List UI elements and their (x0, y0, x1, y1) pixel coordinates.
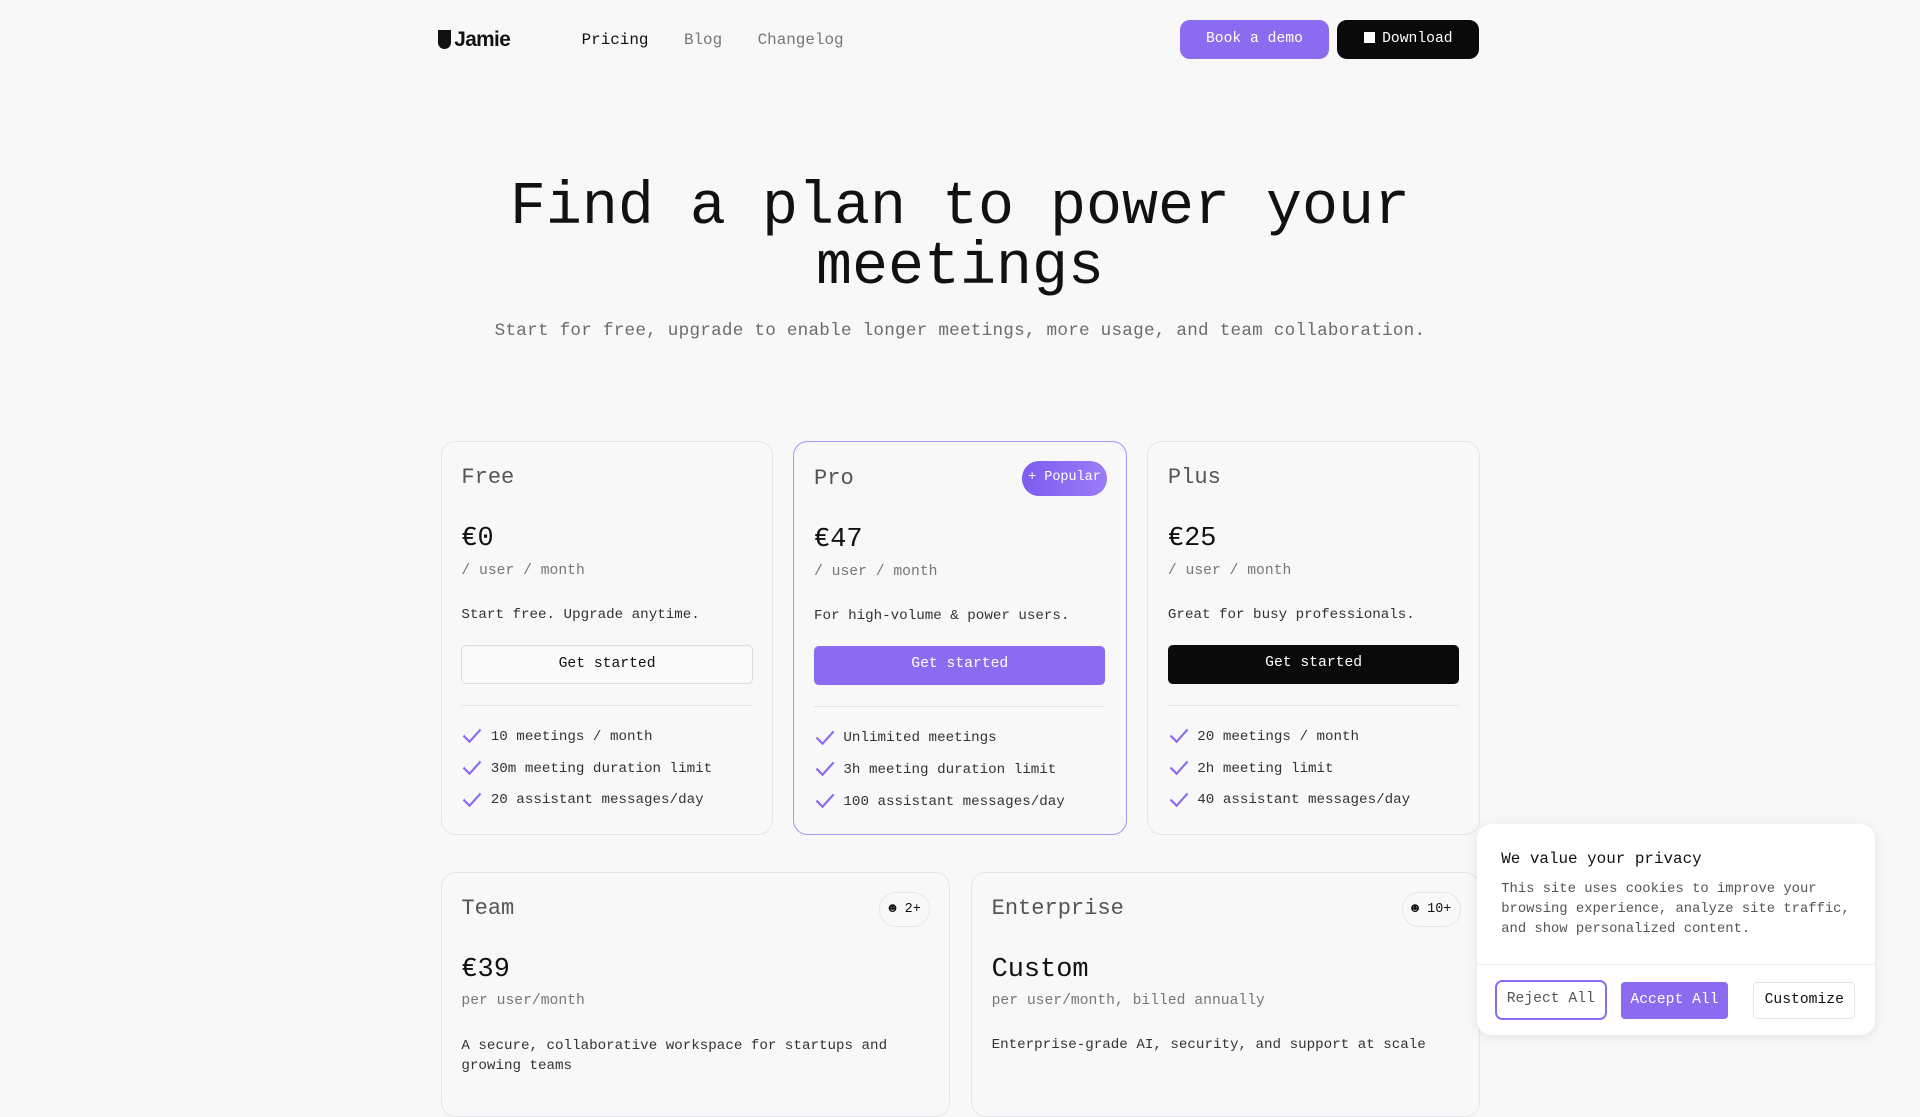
panel: team (441, 872, 950, 1117)
button: accept (1621, 982, 1728, 1019)
title: meetings (816, 234, 1104, 302)
panel: free: €0 (461, 524, 494, 554)
button: customize (1753, 982, 1855, 1019)
panel: team: per user/month (461, 993, 585, 1009)
panel: pro: For high-volume & power users. (814, 608, 1069, 624)
button: reject (1495, 980, 1607, 1020)
title (510, 174, 1410, 302)
panel: free: / user / month (461, 563, 585, 579)
panel: pro: / user / month (814, 564, 937, 580)
cookie heading: We value your privacy (1501, 850, 1702, 868)
badge: popular (1022, 461, 1107, 496)
panel: plus: / user / month (1168, 563, 1291, 579)
panel: plus: €25 (1168, 524, 1216, 554)
button: accept: Accept All (1630, 992, 1719, 1008)
panel: pro: 100 assistant messages/day (843, 794, 1065, 810)
panel: pro: Pro (814, 466, 854, 491)
logo: Jamie (454, 28, 510, 51)
button: book a demo: Book a demo (1206, 31, 1303, 47)
panel: pro: €47 (814, 525, 863, 555)
badge: 10+ (1402, 892, 1461, 927)
panel: free: 20 assistant messages/day (491, 792, 704, 808)
button: customize: Customize (1765, 992, 1844, 1008)
badge: popular: + Popular (1028, 470, 1101, 485)
button (1168, 645, 1459, 684)
button: reject: Reject All (1507, 991, 1595, 1007)
cookie text: This site uses cookies to improve your browsing experience, analyze site traffic, and show personalized content. (1501, 881, 1850, 937)
panel: enterprise: Enterprise-grade AI, security, and support at scale (992, 1037, 1426, 1053)
panel: team: Team (461, 896, 514, 921)
panel: pro: 3h meeting duration limit (843, 762, 1056, 778)
panel: free (441, 441, 773, 835)
panel: enterprise (971, 872, 1480, 1117)
cookie banner (1477, 824, 1875, 1035)
panel: team: A secure, collaborative workspace for startups and growing teams (461, 1038, 887, 1074)
features: Unlimited meetings (843, 730, 997, 746)
button: Get started (911, 656, 1008, 672)
panel: enterprise: Custom (992, 955, 1089, 985)
button: download (1337, 20, 1479, 59)
panel: team: €39 (461, 955, 510, 985)
panel: enterprise: per user/month, billed annually (992, 993, 1265, 1009)
title: Find a plan to power your (510, 174, 1410, 242)
panel: free: Start free. Upgrade anytime. (461, 607, 700, 623)
nav links: Pricing Blog Changelog (582, 31, 844, 49)
panel: free: 30m meeting duration limit (491, 760, 712, 776)
nav bar (438, 20, 1479, 59)
panel: plus: 2h meeting limit (1197, 760, 1334, 776)
panel: enterprise: Enterprise (992, 896, 1124, 921)
button (461, 645, 753, 684)
features: 20 meetings / month (1197, 729, 1359, 745)
button: Get started (559, 656, 656, 672)
badge: 10+: ☻ 10+ (1411, 902, 1451, 917)
button (814, 646, 1105, 685)
panel: free: Free (461, 465, 514, 490)
badge: 2+: ☻ 2+ (889, 902, 921, 917)
subtitle: Start for free, upgrade to enable longer meetings, more usage, and team collaboration. (495, 321, 1425, 341)
button: download: Download (1382, 31, 1453, 47)
panel: plus: Plus (1168, 465, 1221, 490)
panel: pro (793, 441, 1127, 835)
button: book a demo (1180, 20, 1329, 59)
button: Get started (1265, 655, 1362, 671)
features: 10 meetings / month (491, 729, 653, 745)
panel: plus (1147, 441, 1480, 835)
panel: plus: 40 assistant messages/day (1197, 792, 1410, 808)
panel: plus: Great for busy professionals. (1168, 607, 1415, 623)
badge: 2+ (879, 892, 930, 927)
